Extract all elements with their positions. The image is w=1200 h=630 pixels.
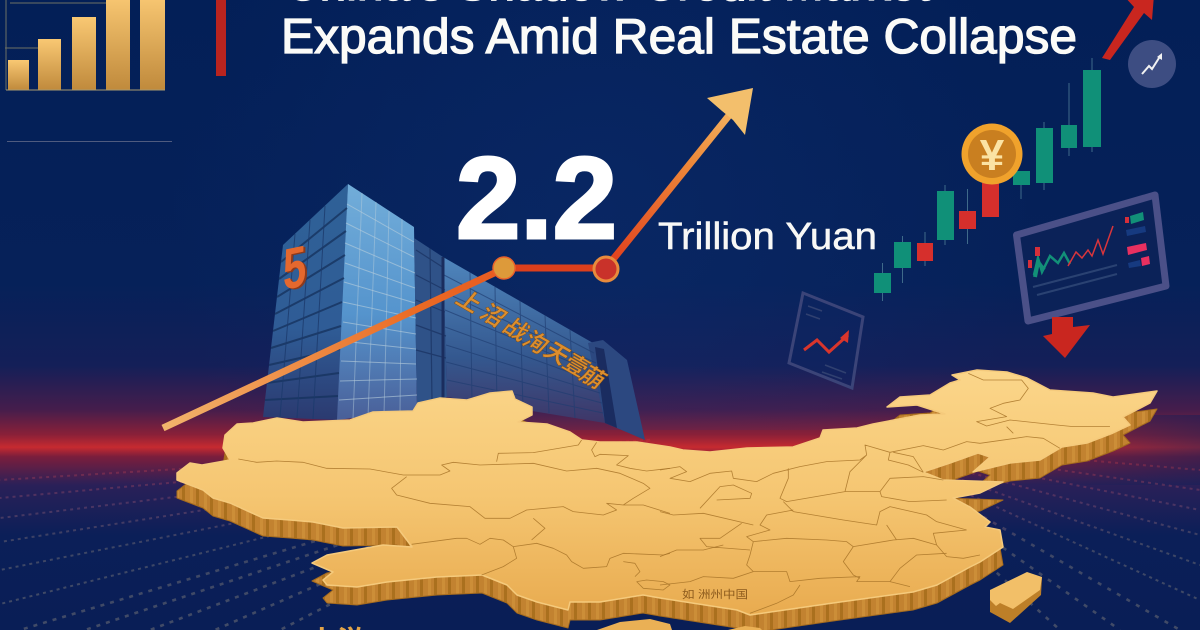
value unit: Trillion Yuan (658, 216, 877, 258)
island: Taiwan (990, 572, 1042, 623)
province borders east (660, 373, 1110, 613)
icon: monitor with chart (1016, 195, 1166, 321)
building sign: number 5: 5 (285, 234, 308, 304)
building (263, 184, 645, 440)
province borders west (238, 440, 670, 590)
building sign: Chinese lettering (451, 286, 612, 393)
building sign: Chinese lettering: 沼 (475, 300, 512, 331)
building sign: Chinese lettering: 壹 (558, 350, 595, 381)
arrow: red rising (1102, 0, 1154, 60)
icon: document card with chart (789, 293, 863, 388)
icon: yuan coin (962, 124, 1022, 184)
trend marker gold (493, 257, 515, 279)
building sign: Chinese lettering: 洵 (518, 327, 555, 358)
building sign: number 5: 5 (283, 233, 306, 303)
arrow head (707, 88, 753, 135)
data stream floor pattern (0, 440, 1200, 630)
island: Hainan (597, 619, 762, 630)
value: 2.2: 2.2 (456, 133, 617, 263)
map of China (177, 370, 1157, 630)
building sign: Chinese lettering: 上 (451, 286, 488, 317)
map extrusion side (177, 388, 1157, 630)
trend marker red (594, 257, 618, 281)
building sign: Chinese lettering: 萠 (575, 362, 612, 393)
icon: trend badge (1128, 40, 1176, 88)
map small label: 如 洲州中国 (682, 587, 748, 601)
building sign: Chinese lettering: 天 (539, 338, 576, 369)
candlestick chart (874, 58, 1101, 301)
building sign: Chinese lettering: 战 (498, 314, 535, 345)
trend line with arrow (163, 88, 753, 428)
title: Expands Amid Real Estate Collapse (281, 10, 1077, 64)
icon: gold bar chart (5, 0, 165, 90)
icon: yuan coin: ¥ (980, 131, 1005, 180)
map top surface (177, 370, 1157, 615)
arrow: red falling (1043, 317, 1090, 358)
title accent bar (216, 0, 226, 76)
